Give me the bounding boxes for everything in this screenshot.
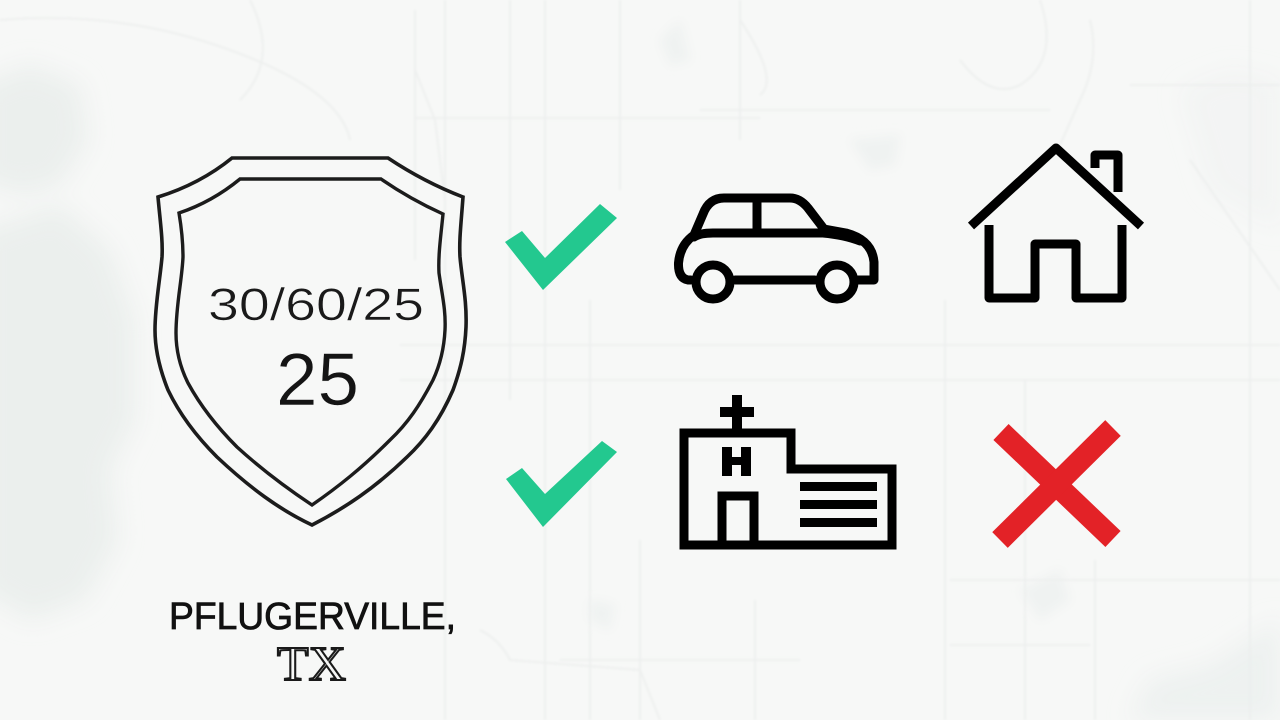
icon: red cross [1000, 428, 1113, 540]
shield outer outline [155, 158, 466, 525]
state abbreviation: TX [277, 636, 346, 691]
city name: PFLUGERVILLE, [169, 596, 456, 638]
icon: hospital [684, 395, 892, 545]
icon: green check bottom [506, 441, 617, 527]
location label [169, 596, 456, 691]
icon: house [971, 148, 1141, 298]
shield inner outline [176, 179, 445, 505]
icon: car [678, 198, 874, 299]
icon: green check top [505, 204, 617, 290]
shield badge [155, 158, 466, 525]
shield label: ratio: 30/60/25 [208, 279, 424, 330]
shield label: number: 25 [276, 338, 359, 421]
